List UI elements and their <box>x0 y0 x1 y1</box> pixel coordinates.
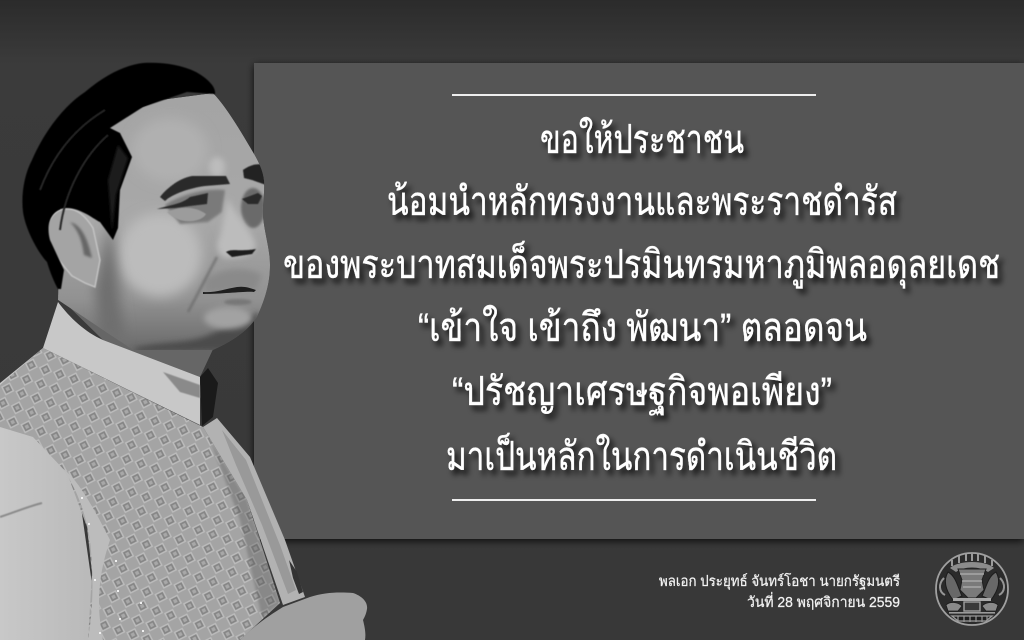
placket weave band <box>222 430 296 594</box>
right eyebrow <box>243 164 266 185</box>
hair side strands <box>108 145 128 232</box>
mouth <box>203 287 256 294</box>
placket edge detail <box>289 560 303 594</box>
chin highlight <box>204 307 252 329</box>
neck <box>58 240 225 377</box>
vest <box>0 348 280 640</box>
nostril <box>226 249 256 257</box>
top divider <box>452 94 816 96</box>
upper lip <box>206 269 260 290</box>
signature text <box>659 572 900 611</box>
icon: government seal <box>936 553 1008 625</box>
seal flame crown <box>950 562 994 572</box>
nasolabial fold <box>188 257 217 312</box>
signature name: พลเอก ประยุทธ์ จันทร์โอชา นายกรัฐมนตรี <box>659 572 900 590</box>
vest shadow near placket <box>210 440 280 618</box>
seal vase <box>958 569 986 598</box>
bottom divider <box>452 499 816 501</box>
lower lip shadow <box>224 299 252 305</box>
skin base <box>58 93 270 350</box>
collar fold shadow <box>163 372 200 398</box>
seal pedestal <box>964 602 980 611</box>
quote text <box>283 116 1000 479</box>
torso base and sleeve <box>0 348 100 640</box>
seal bar <box>953 598 991 601</box>
cheek highlight <box>118 213 202 297</box>
signature date: วันที่ 28 พฤศจิกายน 2559 <box>747 592 900 611</box>
collar dark gap <box>200 368 218 426</box>
quote line 5: “ปรัชญาเศรษฐกิจพอเพียง” <box>452 370 832 416</box>
collar <box>43 302 200 425</box>
eye socket shadow <box>165 190 225 224</box>
hair <box>22 63 215 289</box>
vest inner lapel <box>62 468 110 640</box>
forehead centre highlight <box>209 157 225 177</box>
seal base band <box>949 612 995 614</box>
placket <box>203 418 305 605</box>
right eye <box>242 193 262 204</box>
portrait: man in profile wearing patterned vest <box>0 63 367 640</box>
quote line 6: มาเป็นหลักในการดำเนินชีวิต <box>446 432 837 479</box>
hand <box>240 592 367 640</box>
nose <box>217 198 256 258</box>
hair sheen <box>40 110 108 230</box>
forehead highlight <box>137 121 204 176</box>
left eyebrow <box>160 176 230 201</box>
face <box>58 93 270 352</box>
rear jaw shadow <box>95 220 125 340</box>
left eye <box>157 193 208 209</box>
quote line 2: น้อมนำหลักทรงงานและพระราชดำรัส <box>387 180 897 224</box>
eye bag <box>167 208 206 221</box>
vest sequins <box>81 497 144 634</box>
seal lions <box>945 572 999 600</box>
quote line 4: “เข้าใจ เข้าถึง พัฒนา” ตลอดจน <box>418 304 867 350</box>
ear <box>47 209 100 287</box>
under chin shadow <box>135 312 260 352</box>
sleeve crease <box>0 503 42 517</box>
inner ear shadow <box>70 222 92 258</box>
quote line 1: ขอให้ประชาชน <box>540 116 744 162</box>
right eye socket <box>241 188 265 228</box>
panel: quote background <box>254 63 1024 539</box>
